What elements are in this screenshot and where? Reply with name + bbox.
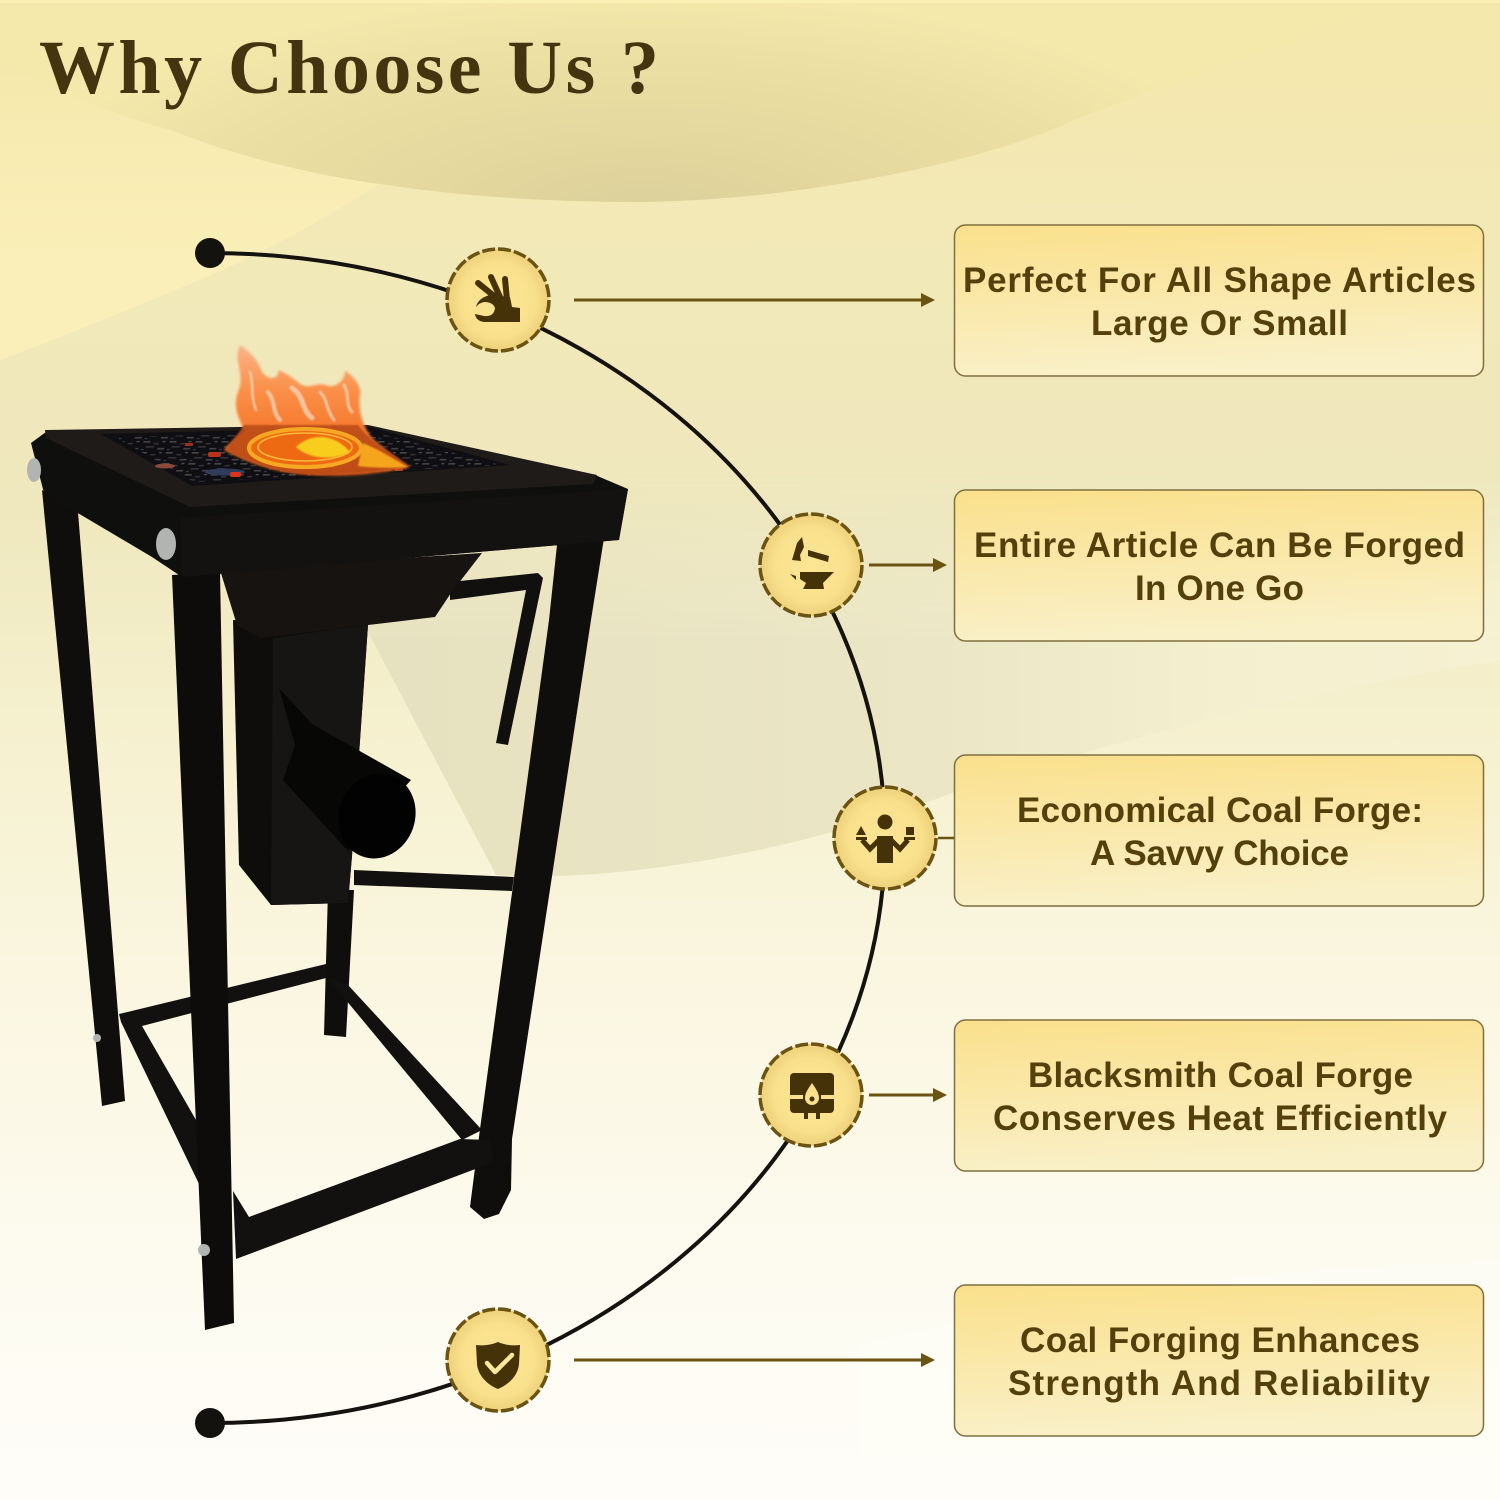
card 1 text: [963, 261, 1476, 343]
card 3 text: Economical Coal Forge:: [1017, 791, 1423, 830]
feature row 1: [447, 225, 1484, 376]
card 5: [954, 1285, 1484, 1436]
card 5 text: Coal Forging Enhances: [1020, 1321, 1420, 1360]
connector arrow 2: [869, 558, 947, 572]
end dot bottom: [195, 1408, 225, 1438]
fire: [224, 345, 410, 476]
badge 5: [447, 1309, 549, 1411]
card 4: [954, 1020, 1484, 1171]
badge 1: [447, 249, 549, 351]
curved connector line: [210, 253, 885, 1423]
card 2 text: Entire Article Can Be Forged: [974, 526, 1465, 565]
badge 4: [760, 1044, 862, 1146]
icon: shield check: [476, 1342, 520, 1389]
connector arrow 1: [574, 293, 935, 307]
card 4 text: [993, 1056, 1448, 1138]
coals: [115, 431, 500, 482]
feature row 2: [760, 490, 1484, 641]
card 2: [954, 490, 1484, 641]
connector arrow 4: [869, 1088, 947, 1102]
card 4 text: Blacksmith Coal Forge: [1028, 1056, 1413, 1095]
card 3: [954, 755, 1484, 906]
card 2 text: In One Go: [1135, 569, 1304, 608]
icon: ok hand: [475, 277, 520, 322]
card 1 text: Large Or Small: [1091, 304, 1348, 343]
card 1 text: Perfect For All Shape Articles: [963, 261, 1476, 300]
bolts: [27, 458, 210, 1256]
icon: person weighing choices: [856, 814, 915, 863]
feature row 5: [447, 1285, 1484, 1436]
card 4 text: Conserves Heat Efficiently: [993, 1099, 1448, 1138]
end dot top: [195, 238, 225, 268]
connector line 3: [938, 837, 954, 839]
card 3 text: A Savvy Choice: [1090, 834, 1349, 873]
product illustration: coal forge: [27, 425, 628, 1330]
icon: hammer and anvil: [790, 537, 834, 589]
badge 3: [834, 787, 936, 889]
card 5 text: [1008, 1321, 1431, 1403]
feature row 3: [834, 755, 1484, 906]
icon: heat conserving furnace: [788, 1073, 836, 1119]
card 3 text: [1017, 791, 1423, 873]
card 5 text: Strength And Reliability: [1008, 1364, 1431, 1403]
card 2 text: [974, 526, 1465, 608]
badge 2: [760, 514, 862, 616]
feature row 4: [760, 1020, 1484, 1171]
title: Why Choose Us ?: [39, 26, 659, 110]
connector arrow 5: [574, 1353, 935, 1367]
card 1: [954, 225, 1484, 376]
